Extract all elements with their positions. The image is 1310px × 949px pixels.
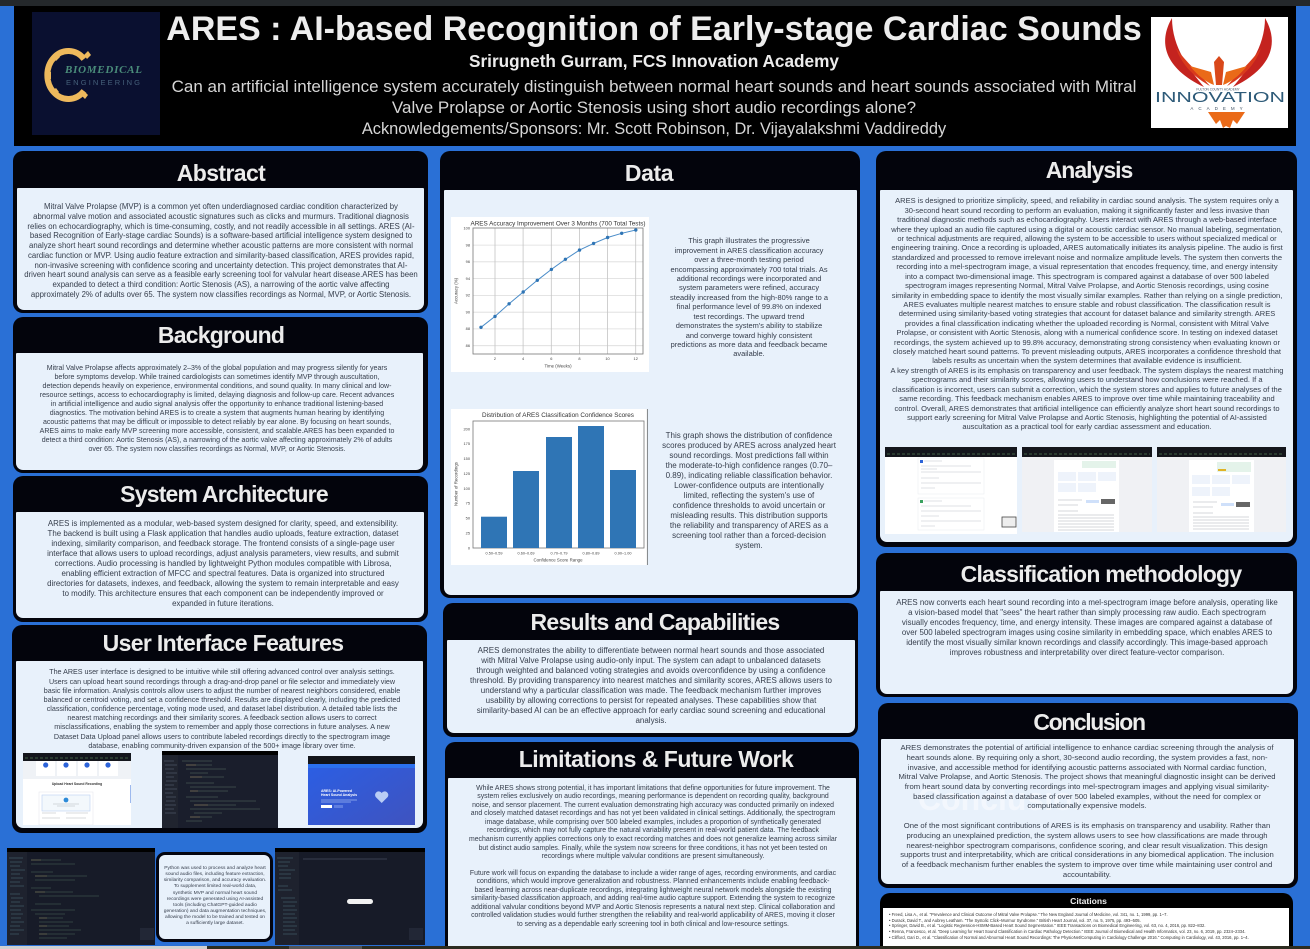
line chart: accuracy improvement: Accuracy (%): [454, 277, 458, 304]
background text: Mitral Valve Prolapse affects approximately 2–3% of the global population and may progress silently for years: [47, 364, 387, 372]
citations list: • Durack, David T., and Aubrey Leatham. "The Systolic Click–Murmur Syndrome." British Heart Journal, vol. 37, no. 5, 1975, pp. 493–505.: [889, 918, 1141, 923]
bar chart: confidence distribution: [451, 409, 648, 565]
bar chart: confidence distribution: 25: [466, 530, 470, 535]
analysis text: control. Overall, ARES demonstrates that artificial intelligence can efficiently analyze short heart sound recordings to: [894, 404, 1280, 413]
background body fill: [16, 353, 423, 470]
abstract text: driven heart sound analysis can serve as a feasible early screening tool for valvular heart disease.ARES has been: [24, 270, 418, 279]
bar chart: confidence distribution: 50: [466, 516, 471, 521]
screenshot: upload page: Upload Heart Sound Recording: [52, 782, 102, 786]
bar chart: confidence distribution: Distribution of ARES Classification Confidence Scores: [482, 412, 634, 419]
results body fill: [447, 640, 855, 733]
bar chart: confidence distribution: 150: [464, 456, 471, 461]
line chart: accuracy improvement: 12: [634, 356, 638, 361]
confidence chart description: [662, 431, 836, 550]
conclusion text first paragraph: [898, 743, 1276, 810]
results text: similarity-based AI can be an effective approach for early cardiac sound screening and educational: [477, 706, 825, 715]
research question and acknowledgements: [172, 76, 1136, 138]
panel: limitations and future work: [445, 742, 859, 948]
future work text: additional valvular conditions beyond MVP and Aortic Stenosis represents a natural next step. Clinical collaboration and: [471, 904, 835, 911]
bar chart: confidence distribution: Confidence Score Range: [533, 558, 583, 562]
future work text: Future work will focus on expanding the database to include a wider range of ages, recording environments, and cardiac: [470, 870, 836, 877]
line chart: accuracy improvement: 2: [494, 356, 496, 361]
conclusion text second paragraph: [900, 821, 1274, 879]
confidence chart description: Lower-confidence outputs are intentionally: [674, 481, 824, 490]
header banner: [14, 6, 1296, 146]
conclusion text first paragraph: invasive, and accessible method for identifying acoustic patterns associated with Normal cardiac function,: [908, 763, 1266, 772]
system architecture text: interface that allows users to upload recordings, adjust analysis parameters, view results, and submit: [47, 549, 399, 558]
user interface body fill: [16, 661, 423, 828]
panel: abstract: [13, 151, 428, 313]
limitations text: [469, 784, 837, 860]
line chart: accuracy improvement: 94: [466, 276, 471, 281]
conclusion text first paragraph: computationally expensive models.: [1027, 801, 1147, 810]
analysis text: or technical adjustments are required, allowing the system to be accessible to users without specialized medical or: [897, 234, 1277, 243]
logo: innovation academy: FULTON COUNTY ACADEMY: [1196, 88, 1240, 92]
limitations text: image database, while comprising over 500 labeled examples, includes a proportion of synthetically generated: [485, 819, 821, 826]
panel: citations: [880, 893, 1293, 948]
system architecture text: enabling efficient extraction of MFCC and spectral features. Data is organized into structured: [61, 569, 385, 578]
user interface text: misclassifications, enabling the system to remember and apply those corrections in future analyses. A new: [54, 723, 390, 731]
conclusion text second paragraph: accountability.: [1063, 870, 1111, 879]
bar chart: confidence distribution: Number of Recordings: [454, 461, 458, 506]
panel: background: [13, 317, 428, 473]
abstract text: based Recognition of Early-stage cardiac Sounds) is a software-based artificial intelligence system designed to: [30, 231, 412, 240]
user interface text: basic file information. Analysis controls allow users to adjust the number of nearest neighbors considered, enable: [44, 687, 400, 695]
panel: user interface features: [12, 625, 427, 833]
callout text: a sufficiently large dataset.: [186, 921, 244, 926]
confidence chart description: the moderate-to-high confidence ranges (0.70–: [666, 461, 832, 470]
analysis text: A key strength of ARES is its emphasis on transparency and user feedback. The system displays the nearest matching: [890, 366, 1283, 375]
background text: acoustic patterns that may be difficult or impossible to detect reliably by ear alone. By focusing on heart sounds,: [43, 419, 391, 426]
background text: ARES aims to make early MVP screening more accessible, consistent, and scalable.ARES has been expanded to: [40, 428, 394, 435]
analysis text: where they upload an audio file captured using a digital or acoustic cardiac sensor. No manual labeling, segmentation,: [891, 225, 1283, 234]
analysis text: standardized and processed to remove irrelevant noise and normalize amplitude levels. The system then converts the: [892, 253, 1282, 262]
analysis body fill: [880, 190, 1293, 542]
line chart: accuracy improvement: 92: [466, 293, 470, 298]
callout text: generation) and data augmentation techniques,: [164, 909, 266, 914]
bar chart: confidence distribution: 75: [466, 501, 470, 506]
user interface text: database, enabling community-driven expansion of the 500+ image library over time.: [88, 742, 356, 750]
conclusion text first paragraph: ARES demonstrates the potential of artificial intelligence to enhance cardiac screening through the analysis of: [900, 743, 1274, 752]
callout text: To supplement limited real-world data,: [174, 884, 256, 889]
line chart: accuracy improvement: 96: [466, 259, 470, 264]
confidence chart description: 0.89), indicating reliable classification behavior.: [666, 471, 832, 480]
confidence chart description: This graph shows the distribution of confidence: [666, 431, 832, 440]
callout text: synthetic MVP and normal heart sound: [173, 891, 257, 896]
system architecture text: [47, 519, 399, 608]
data body fill: [444, 190, 857, 595]
line chart: accuracy improvement: 86: [466, 343, 470, 348]
results text: through weighted and balanced voting strategies and avoids overconfidence by using a confidence: [476, 666, 826, 675]
citations heading: Citations: [1070, 896, 1107, 906]
limitations text: recordings where multiple valvular conditions are present simultaneously.: [542, 853, 764, 860]
callout text: Python was used to process and analyze heart: [164, 866, 266, 871]
line chart: accuracy improvement: [451, 217, 649, 372]
system architecture body fill: [16, 512, 424, 618]
conclusion text second paragraph: One of the most significant contributions of ARES is its emphasis on transparency and usability. Rather than: [904, 821, 1270, 830]
confidence chart description: limited, reflecting the system's use of: [684, 491, 814, 500]
classification heading: Classification methodology: [961, 561, 1241, 587]
bar chart: confidence distribution: 0.60–0.69: [518, 552, 534, 556]
accuracy chart description: additional recordings were incorporated and: [677, 274, 821, 283]
accuracy chart description: steadily increased from the high-80% range to a: [670, 293, 828, 302]
analysis text: traditional diagnostic methods such as echocardiography. Users interact with ARES through a web-based interface: [897, 215, 1277, 224]
callout text: [164, 866, 266, 926]
system architecture text: expanded in future iterations.: [172, 599, 274, 608]
analysis text: engineering training. Once a recording is uploaded, ARES automatically initiates its analysis pipeline. The audio is first: [891, 243, 1283, 252]
panel: classification methodology: [876, 553, 1297, 697]
classification text: improves robustness and interpretability over direct feature-vector comparison.: [950, 648, 1224, 657]
screenshot: upload page: [23, 753, 131, 825]
conclusion text first paragraph: heart sounds alone. By requiring only a short, 30-second audio recording, the system provides a fast, non-: [906, 753, 1268, 762]
logo: innovation academy: ACADEMY: [1190, 106, 1248, 111]
limitations text: system relies exclusively on audio recordings, meaning performance is dependent on recording quality, background: [477, 793, 829, 800]
background text: resource settings, access to echocardiography is limited, delaying diagnosis and follow-up care. Recent advances: [40, 392, 394, 399]
citations body fill: [883, 908, 1289, 948]
user interface text: balanced or centroid voting, and set a confidence threshold. Results are displayed clearly, including the predicted: [44, 696, 400, 704]
user interface text: nearest matching recordings and their similarity scores. A feedback section allows users to correct: [67, 714, 377, 722]
analysis text: ARES is designed to prioritize simplicity, speed, and reliability in cardiac sound analysis. The system requires only a: [895, 196, 1279, 205]
analysis text: provides a final classification indicating whether the uploaded recording is Normal, consistent with Mitral Valve: [905, 319, 1269, 328]
line chart: accuracy improvement: 10: [605, 356, 610, 361]
screenshot: python code editor right: [275, 848, 425, 945]
research question and acknowledgements: Can an artificial intelligence system accurately distinguish between normal heart sounds and heart sounds associated with Mitral: [172, 76, 1136, 96]
analysis text: 30-second heart sound recording to perform an evaluation, making it significantly faster and less invasive than: [905, 206, 1269, 215]
user interface text: Users can upload heart sound recordings through a drag-and-drop panel or file selector and immediately view: [49, 678, 395, 686]
bar chart: confidence distribution: 200: [464, 426, 471, 431]
accuracy chart description: This graph illustrates the progressive: [688, 236, 810, 245]
results text: analysis.: [635, 716, 667, 725]
line chart: accuracy improvement: Time (Weeks): [544, 364, 572, 368]
analysis text: support early screening for Mitral Valve Prolapse and Aortic Stenosis, highlighting the potential of AI-assisted: [907, 413, 1267, 422]
accuracy chart description: demonstrates the system's ability to stabilize: [676, 321, 822, 330]
line chart: accuracy improvement: 4: [522, 356, 525, 361]
background text: in artificial intelligence and audio signal analysis offer the opportunity to enhance traditional listening-based: [51, 401, 383, 408]
user interface text: The ARES user interface is designed to be intuitive while still offering advanced control over analysis settings.: [49, 668, 395, 676]
callout text: sound audio files, including feature extraction,: [165, 872, 265, 877]
panel: results and capabilities: [443, 603, 858, 737]
limitations text: but distinct audio samples. Finally, while the system now screens for three conditions, it has not yet been tested on: [479, 845, 827, 852]
conclusion text second paragraph: producing an unexplained prediction, the system allows users to see how classifications are made through: [906, 831, 1268, 840]
screenshot: code editor: [162, 751, 278, 828]
accuracy chart description: [670, 236, 828, 358]
accuracy chart description: encompassing approximately 700 total trials. As: [670, 265, 828, 274]
future work text: similarity-based classification approach, and adding real-time audio capture support. Extending the system to recognize: [471, 895, 835, 902]
line chart: accuracy improvement: 6: [550, 356, 552, 361]
accuracy chart description: test recordings. The upward trend: [693, 312, 805, 321]
background text: before symptoms develop. While trained cardiologists can sometimes identify MVP through auscultation,: [54, 374, 379, 381]
results heading: Results and Capabilities: [530, 609, 780, 635]
future work text: conditions, which would improve generalization and robustness. Planned enhancements include enabling feedback-: [477, 878, 829, 885]
analysis text: similarity in embedding space to identify the most visually similar examples. Rather than relying on a single prediction,: [892, 291, 1282, 300]
analysis text: into a compact two-dimensional image. This spectrogram is compared against a database of over 500 labeled: [905, 272, 1269, 281]
accuracy chart description: predictions as more data and feedback became: [671, 340, 827, 349]
panel: conclusion: [878, 703, 1298, 888]
limitations text: and closely matched dataset recordings and has not yet been validated in clinical settings. Additionally, the spectrogram: [471, 810, 835, 817]
confidence chart description: the reliability and transparency of ARES as a: [670, 521, 828, 530]
background text: detection depends heavily on experience, environmental conditions, and sound quality. In many clinical and low-: [43, 383, 391, 390]
accuracy chart description: available.: [733, 349, 765, 358]
analysis heading: Analysis: [1046, 157, 1132, 183]
confidence chart description: sound recordings. Most predictions fall within: [669, 451, 829, 460]
logo: biomedical engineering: [32, 12, 160, 135]
abstract text: relies on echocardiography, which is time-consuming, costly, and not readily accessible in all settings. ARES (AI-: [27, 222, 415, 230]
abstract text: approximately 2% of adults over 65. The system now classifies recordings as Normal, MVP, or Aortic Stenosis.: [31, 290, 411, 299]
panel: analysis: [876, 151, 1297, 547]
conclusion text first paragraph: based classification against a database of over 500 labeled examples, without the need for complex or: [913, 792, 1261, 801]
limitations text: recordings, which may not fully capture the natural variability present in real-world patient data. The feedback: [487, 827, 819, 834]
analysis text: determined using similarity-based voting strategies that account for dataset balance and similarity strength. ARES: [899, 309, 1275, 318]
line chart: accuracy improvement: 8: [578, 356, 580, 361]
background text: over 65. The system now classifies recordings as Normal, MVP, or Aortic Stenosis.: [88, 446, 346, 453]
logo: biomedical engineering: ENGINEERING: [66, 78, 140, 87]
bar chart: confidence distribution: 100: [464, 486, 471, 491]
abstract text: abnormal valve motion and associated acoustic signatures such as clicks and murmurs. Traditional diagnosis: [33, 212, 409, 221]
screenshot: python code editor left: [7, 848, 155, 945]
line chart: accuracy improvement: 88: [466, 326, 470, 331]
results text: ARES demonstrates the ability to differentiate between normal heart sounds and those associated: [478, 646, 824, 655]
callout text: recordings were generated using AI-assisted: [167, 897, 263, 902]
abstract text: [24, 202, 418, 299]
system architecture text: to modify. This architecture ensures that each component can be independently improved or: [62, 589, 384, 598]
screenshot: landing page: [308, 756, 415, 825]
background heading: Background: [158, 322, 284, 348]
analysis text: same recording. This feedback mechanism enables ARES to improve over time while maintaining traceability and: [899, 394, 1275, 403]
background text: [40, 364, 394, 453]
system architecture text: directories for datasets, indexes, and feedback, allowing the system to remain interpretable and easy: [47, 579, 399, 588]
abstract text: expanded to detect a third condition: Aortic Stenosis (AS), a narrowing of the aortic valve affecting: [52, 280, 390, 289]
limitations body fill: [448, 778, 856, 948]
classification text: a vision-based model that "sees" the heart rather than simply processing raw audio. Each spectrogram: [908, 608, 1266, 617]
confidence chart description: confidence thresholds to avoid uncertain or: [673, 501, 825, 510]
bar chart: confidence distribution: 0.80–0.89: [583, 552, 599, 556]
bar chart: confidence distribution: 125: [464, 471, 470, 476]
accuracy chart description: system parameters were refined, accuracy: [679, 283, 819, 292]
analysis text: classification is incorrect, users can submit a correction, which the system stores and applies to future analyses of the: [892, 385, 1282, 394]
system architecture text: corrections. Audio processing is handled by lightweight Python modules compatible with Librosa,: [55, 559, 391, 568]
system architecture text: The backend is built using a Flask application that handles audio uploads, feature extraction, dataset: [48, 529, 398, 538]
top screen edge strip: [0, 0, 1310, 6]
callout text: allowing the model to be trained and tested on: [165, 915, 265, 920]
conclusion text second paragraph: nearest-neighbor spectrogram comparisons, confidence scoring, and clear result visualization. This design: [906, 841, 1268, 850]
screenshot: results view: [1022, 447, 1152, 532]
confidence chart description: misleading results. This distribution supports: [670, 511, 828, 520]
bar chart: confidence distribution: 0.90–1.00: [615, 552, 631, 556]
results text: [470, 646, 832, 725]
bar chart: confidence distribution: 0: [468, 545, 471, 550]
abstract text: cardiac function or MVP. Using audio feature extraction and similarity-based classification, ARES provides rapid,: [28, 251, 414, 260]
conclusion text first paragraph: Mitral Valve Prolapse, and Aortic Stenosis. The project shows that meaningful diagnostic insight can be derived: [898, 772, 1276, 781]
conclusion text second paragraph: of a feedback mechanism further enables the system to improve over time while maintaining user control and: [902, 860, 1272, 869]
system architecture heading: System Architecture: [120, 481, 328, 507]
author line: Srirugneth Gurram, FCS Innovation Academy: [469, 51, 839, 71]
conclusion body fill: [881, 739, 1294, 884]
citations list: • Renna, Francesco, et al. "Deep Learning for Heart Sound Classification in Cardiac Pathology Detection." IEEE Journal of Biomedical and Health Informatics, vol. 23, no. 6, 2019, pp. 2324–2334.: [889, 929, 1246, 934]
faint ghost heading behind text: Conclusion: [918, 781, 1092, 817]
future work text: [470, 870, 836, 928]
screenshot: dataset upload: [885, 447, 1017, 534]
user interface text: Dataset Data Upload panel allows users to contribute labeled recordings directly to the spectrogram image: [54, 733, 390, 741]
conclusion text first paragraph: from heart sound data by converting recordings into mel-spectrogram images and applying visual similarity-: [905, 782, 1269, 791]
accuracy chart description: improvement in ARES classification accuracy: [675, 246, 823, 255]
citations list: • Springer, David B., et al. "Logistic Regression-HSMM-Based Heart Sound Segmentation." IEEE Transactions on Biomedical Engineering, vol. 63, no. 4, 2016, pp. 822–832.: [889, 923, 1206, 928]
data heading: Data: [625, 160, 673, 186]
abstract body background: [17, 188, 424, 310]
analysis text: [890, 196, 1283, 431]
future work text: to serving as a dependable early screening tool in both clinical and low-resource settings.: [517, 921, 789, 928]
results text: understand why a particular classification was made. The feedback mechanism further improves: [481, 686, 821, 695]
confidence chart description: screening tool rather than a forced-decision: [672, 531, 826, 540]
line chart: accuracy improvement: 100: [464, 226, 471, 231]
bar chart: confidence distribution: 0.50–0.59: [486, 552, 502, 556]
bar chart: confidence distribution: 0.70–0.79: [551, 552, 567, 556]
abstract text: non-invasive screening with confidence scoring and uncertainty detection. This project demonstrates that AI-: [34, 260, 408, 270]
line chart: accuracy improvement: ARES Accuracy Improvement Over 3 Months (700 Total Tests): [470, 220, 646, 228]
conclusion text second paragraph: supports trust and interpretability, which are critical considerations in any biomedical application. The inclusion: [900, 850, 1274, 859]
abstract text: analyze short heart sound recordings and determine whether acoustic patterns are more consistent with normal: [29, 241, 413, 250]
line chart: accuracy improvement: 98: [466, 242, 470, 247]
analysis text: spectrograms and their similarity scores, allowing users to understand how conclusions were reached. If a: [912, 375, 1262, 384]
citations list: • Clifford, Gari D., et al. "Classification of Normal and Abnormal Heart Sound Recordings: The PhysioNet/Computing in Cardiology Challenge 2016." Computing in Cardiology, vol. 43, 2016, pp. 1–4.: [889, 935, 1249, 940]
limitations text: mechanism currently applies corrections only to exact recording matches and does not generalize learning across similar: [469, 836, 837, 843]
background text: diagnostics. The motivation behind ARES is to create a system that augments human hearing by identifying: [50, 410, 384, 417]
background text: detect a third condition: Aortic Stenosis (AS), a narrowing of the aortic valve affecting approximately 2% of adults: [42, 437, 392, 444]
callout text: similarity comparison, and accuracy evaluation.: [164, 878, 266, 883]
analysis text: labels results as uncertain when the system determines that available evidence is insufficient.: [932, 356, 1242, 365]
analysis text: Prolapse, or consistent with Aortic Stenosis, along with a numerical confidence score. In testing on indexed dataset: [896, 328, 1278, 337]
accuracy chart description: and converge toward highly consistent: [686, 331, 812, 340]
callout: python note: [156, 852, 273, 942]
title: ARES : AI-based Recognition of Early-stage Cardiac Sounds: [166, 10, 1142, 48]
accuracy chart description: final performance level of 99.8% on indexed: [677, 302, 821, 311]
abstract heading: Abstract: [177, 160, 265, 186]
classification text: ARES now converts each heart sound recording into a mel-spectrogram image before analysis, operating like: [896, 598, 1278, 607]
analysis text: auscultation as a practical tool for early cardiac assessment and education.: [962, 422, 1212, 431]
bottom screen edge strip: [0, 946, 1310, 949]
system architecture text: ARES is implemented as a modular, web-based system designed for clarity, speed, and extensibility.: [48, 519, 398, 528]
confidence chart description: system.: [735, 541, 763, 550]
classification text: identify the most visually similar known recordings and classify accordingly. This image-based approach: [906, 638, 1268, 647]
future work text: based learning across near-duplicate recordings, integrating lightweight neural network models alongside the existing: [474, 887, 832, 894]
future work text: controlled validation studies would further strengthen the reliability and real-world applicability of ARES, moving it closer: [471, 912, 835, 919]
confidence chart description: scores produced by ARES across analyzed heart: [662, 441, 836, 450]
logo: biomedical engineering: BIOMEDICAL: [64, 64, 142, 76]
user interface text: [44, 668, 400, 750]
line chart: accuracy improvement: 90: [466, 310, 471, 314]
analysis text: ARES evaluates multiple nearest matches to ensure stable and robust classification. The classification result is: [903, 300, 1271, 309]
logo: innovation academy: INNOVATION: [1155, 90, 1285, 106]
research question and acknowledgements: Acknowledgements/Sponsors: Mr. Scott Robinson, Dr. Vijayalakshmi Vaddireddy: [362, 120, 946, 138]
results text: threshold. By providing transparency into nearest matches and similarity scores, ARES allows users to: [470, 676, 832, 685]
citations list: [889, 912, 1249, 940]
citations list: • Freed, Lisa A., et al. "Prevalence and Clinical Outcome of Mitral Valve Prolapse." The New England Journal of Medicine, vol. 341, no. 1, 1999, pp. 1–7.: [889, 912, 1168, 917]
limitations heading: Limitations & Future Work: [519, 746, 793, 772]
abstract text: Mitral Valve Prolapse (MVP) is a common yet often underdiagnosed cardiac condition characterized by: [44, 202, 398, 211]
conclusion heading: Conclusion: [1033, 709, 1145, 735]
screenshot: landing page: Heart Sound Analysis: [321, 793, 357, 797]
limitations text: While ARES shows strong potential, it has important limitations that define opportunities for future improvement. The: [476, 785, 830, 792]
user interface text: classification, confidence percentage, voting mode used, and dataset label distribution. A detailed table lists the: [47, 705, 397, 713]
bar chart: confidence distribution: 175: [464, 441, 470, 446]
analysis text: recordings, the system achieved up to 99.8% accuracy, demonstrating strong consistency when evaluating known or: [894, 338, 1280, 347]
classification text: [896, 598, 1278, 657]
research question and acknowledgements: Valve Prolapse or Aortic Stenosis using short audio recordings alone?: [392, 98, 916, 116]
logo: innovation academy: [1151, 17, 1288, 128]
analysis text: closely matched heart sound patterns. To prevent misleading outputs, ARES incorporates a confidence threshold that: [893, 347, 1281, 356]
limitations text: noise, and sensor placement. The current evaluation demonstrating high accuracy was conducted primarily on indexed: [472, 802, 834, 809]
screenshot: landing page: ARES: AI-Powered: [321, 789, 352, 793]
screenshot: results view alternate: [1157, 447, 1286, 532]
panel: system architecture: [13, 476, 428, 622]
classification body fill: [880, 591, 1293, 694]
analysis text: spectrogram images representing Normal, Mitral Valve Prolapse, and Aortic Stenosis recordings, using cosine: [905, 281, 1269, 290]
system architecture text: indexing, similarity comparison, and feedback storage. The frontend consists of a single-page user: [51, 539, 395, 548]
classification text: visually encodes frequency, time, and energy intensity. These images are compared against a database of: [902, 618, 1272, 627]
results text: usability by allowing corrections to persist for repeated analyses. These capabilities show that: [486, 696, 816, 705]
panel: data: [440, 151, 860, 598]
user interface heading: User Interface Features: [103, 630, 343, 656]
analysis text: recording into a mel-spectrogram image, a visual representation that encodes frequency, time, and energy intensity: [896, 262, 1278, 271]
classification text: over 500 labeled spectrogram images using cosine similarity in embedding space, which enables ARES to: [902, 628, 1272, 637]
results text: with Mitral Valve Prolapse using audio-only input. The system can adapt to unbalanced datasets: [481, 656, 821, 665]
accuracy chart description: over a three-month testing period: [694, 255, 804, 264]
callout text: tools (including ChatGPT-guided audio: [173, 903, 257, 908]
